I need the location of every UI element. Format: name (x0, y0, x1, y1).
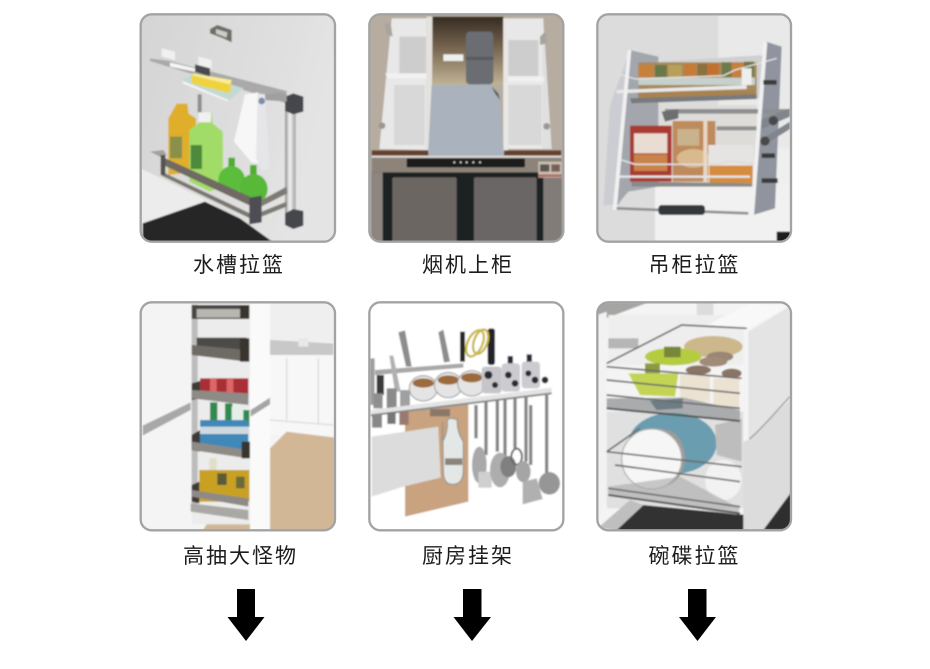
panel: 水槽拉篮 (140, 14, 337, 277)
photo: sink pull-out basket (140, 14, 337, 244)
photo: wall cabinet pull-down basket (597, 14, 793, 244)
panel: 烟机上柜 (369, 14, 565, 277)
panel border (141, 14, 335, 242)
label: 水槽拉篮 (193, 254, 285, 277)
label: 碗碟拉篮 (648, 545, 740, 568)
label: 厨房挂架 (422, 545, 514, 568)
panel: 高抽大怪物 (140, 302, 337, 568)
panel border (597, 302, 791, 530)
panel border (141, 302, 335, 530)
arrow: right (679, 589, 716, 641)
panel: 厨房挂架 (369, 302, 565, 568)
label: 吊柜拉篮 (648, 254, 740, 277)
label: 高抽大怪物 (183, 545, 298, 568)
photo: tall pull-out pantry (140, 302, 337, 532)
arrow: middle (454, 589, 491, 641)
photo: range hood upper cabinet (369, 14, 565, 244)
photo: kitchen wall rack (369, 302, 565, 532)
panel border (369, 14, 563, 242)
label: 烟机上柜 (422, 254, 514, 277)
panel border (369, 302, 563, 530)
panel: 吊柜拉篮 (597, 14, 793, 277)
arrow: left (228, 589, 264, 641)
photo: dish pull-out basket (597, 302, 793, 532)
panel border (597, 14, 791, 242)
panel: 碗碟拉篮 (597, 302, 793, 568)
